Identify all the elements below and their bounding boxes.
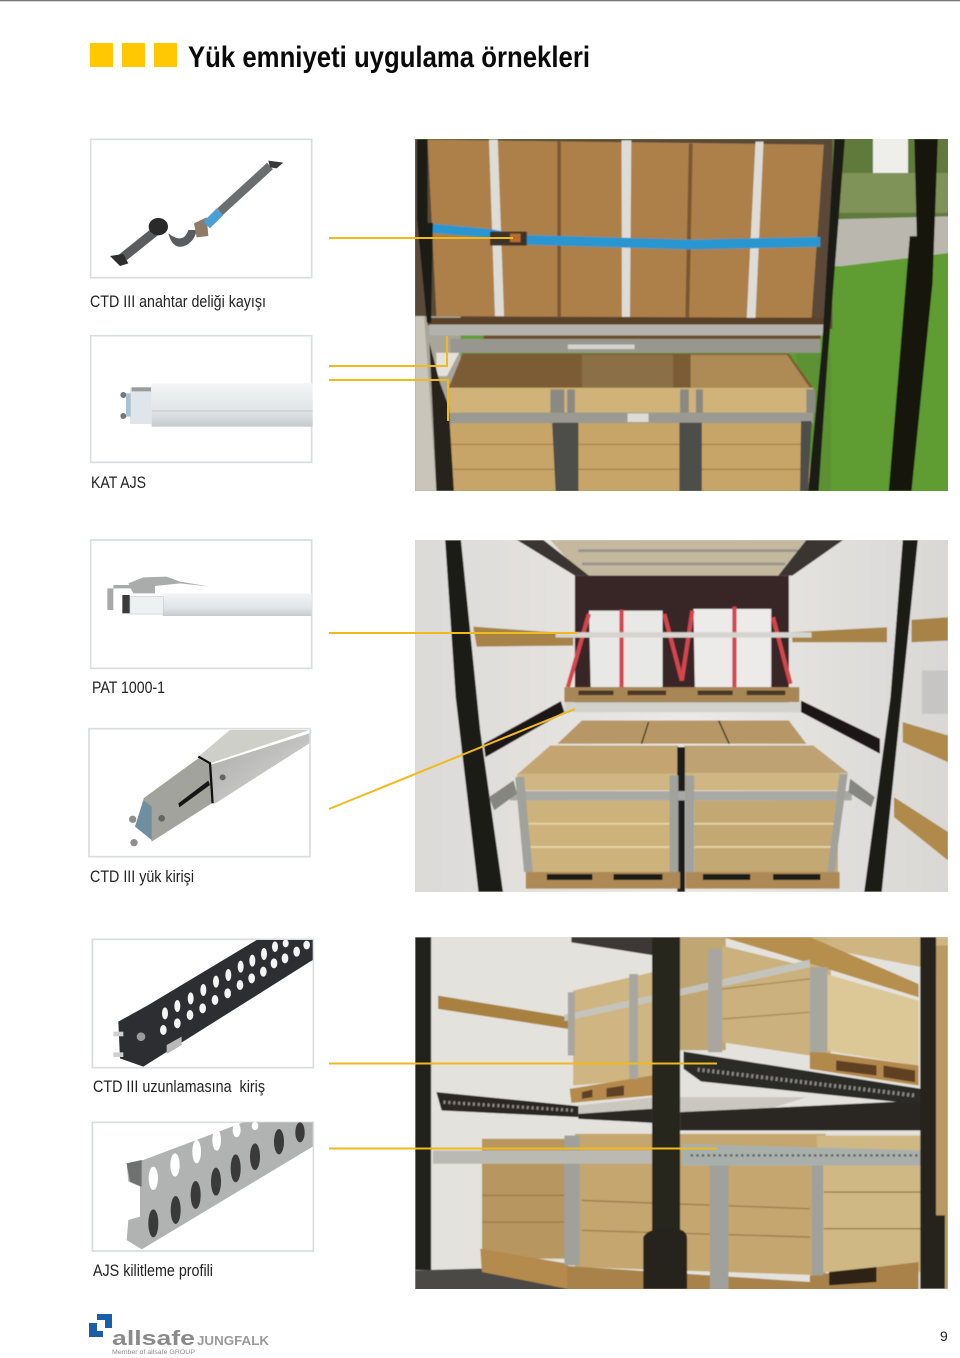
- panel: PAT 1000-1 product image: [91, 540, 312, 668]
- connector line: KAT AJS upper beam: [329, 336, 447, 366]
- panel: strap product image: [91, 139, 312, 278]
- connector line: CTD III longitudinal beam: [329, 1062, 717, 1064]
- photo: rolls on upper deck and crates below: [415, 540, 948, 892]
- connector line: CTD III load beam: [329, 709, 575, 809]
- panel: CTD III longitudinal beam product image: [92, 939, 313, 1068]
- connector line: PAT 1000-1: [329, 632, 577, 634]
- logo: allsafe Jungfalk: JUNGFALK: [197, 1333, 270, 1348]
- photo: side view of double-deck load: [415, 937, 948, 1289]
- caption: CTD III uzunlamasına kiriş: [93, 1078, 265, 1096]
- logo: allsafe Jungfalk: Member of allsafe GROUP: [112, 1349, 195, 1356]
- caption: AJS kilitleme profili: [93, 1262, 213, 1280]
- caption: CTD III yük kirişi: [90, 868, 194, 886]
- page number: 9: [940, 1328, 948, 1344]
- connector line: AJS locking profile: [329, 1148, 717, 1150]
- title: Yük emniyeti uygulama örnekleri: [188, 41, 590, 74]
- connector line: strap to buckle: [329, 237, 513, 239]
- caption: CTD III anahtar deliği kayışı: [90, 293, 266, 311]
- caption: PAT 1000-1: [92, 679, 165, 697]
- title icon: three yellow squares: [90, 43, 177, 67]
- photo: cartons and pallets with strap: [415, 139, 948, 491]
- panel: CTD III load beam product image: [89, 729, 310, 857]
- panel: AJS locking profile product image: [92, 1122, 313, 1251]
- logo: allsafe Jungfalk: [89, 1314, 270, 1356]
- logo: allsafe Jungfalk: allsafe: [112, 1328, 195, 1350]
- connector line: KAT AJS lower beam: [329, 380, 448, 421]
- caption: KAT AJS: [91, 474, 146, 492]
- panel: KAT AJS product image: [91, 336, 313, 462]
